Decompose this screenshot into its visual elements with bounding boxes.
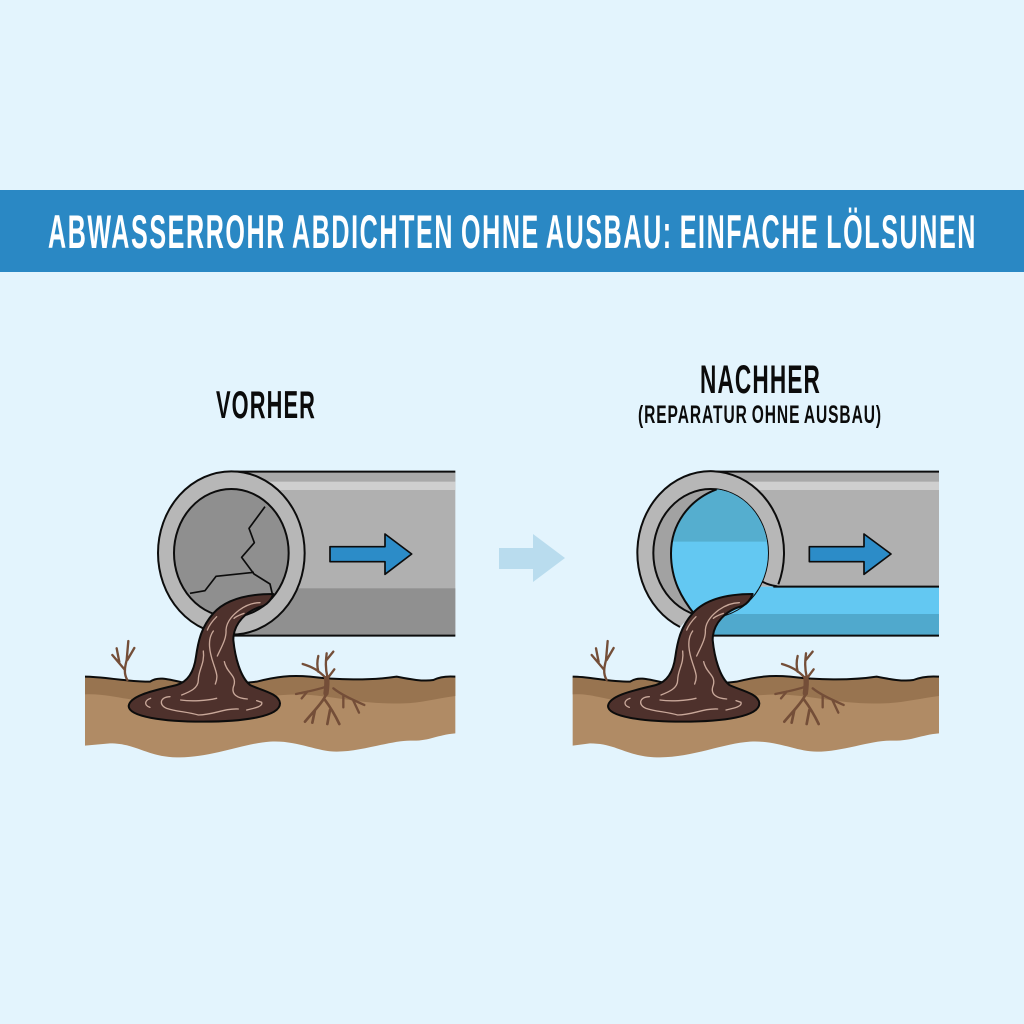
pipe interior <box>174 489 289 617</box>
ground <box>85 676 455 757</box>
pipe body <box>711 472 939 636</box>
subheading: repair without removal: (REPARATUR OHNE AUSBAU) <box>638 401 882 429</box>
pipe interior wall <box>653 489 768 617</box>
arrow: before to after <box>499 534 565 582</box>
pipe opening ring <box>158 471 305 635</box>
dead plant <box>592 641 614 680</box>
blue liner opening <box>671 489 773 615</box>
heading: after: NACHHER <box>700 358 821 402</box>
roots <box>296 652 364 724</box>
panel: before illustration <box>85 471 455 757</box>
pipe body <box>231 472 455 636</box>
sludge leak <box>129 594 280 722</box>
crack lines <box>190 507 272 594</box>
ground <box>573 676 939 757</box>
sludge leak <box>608 594 759 722</box>
heading: before: VORHER <box>216 384 316 427</box>
title banner <box>0 190 1024 272</box>
dead plant <box>112 641 134 680</box>
flow arrow <box>809 534 891 574</box>
flow arrow <box>330 534 412 574</box>
pipe opening ring <box>637 471 784 627</box>
heading: after <box>638 358 882 429</box>
roots <box>775 652 844 724</box>
repair liner edge <box>762 581 777 586</box>
panel: after illustration <box>573 471 939 757</box>
